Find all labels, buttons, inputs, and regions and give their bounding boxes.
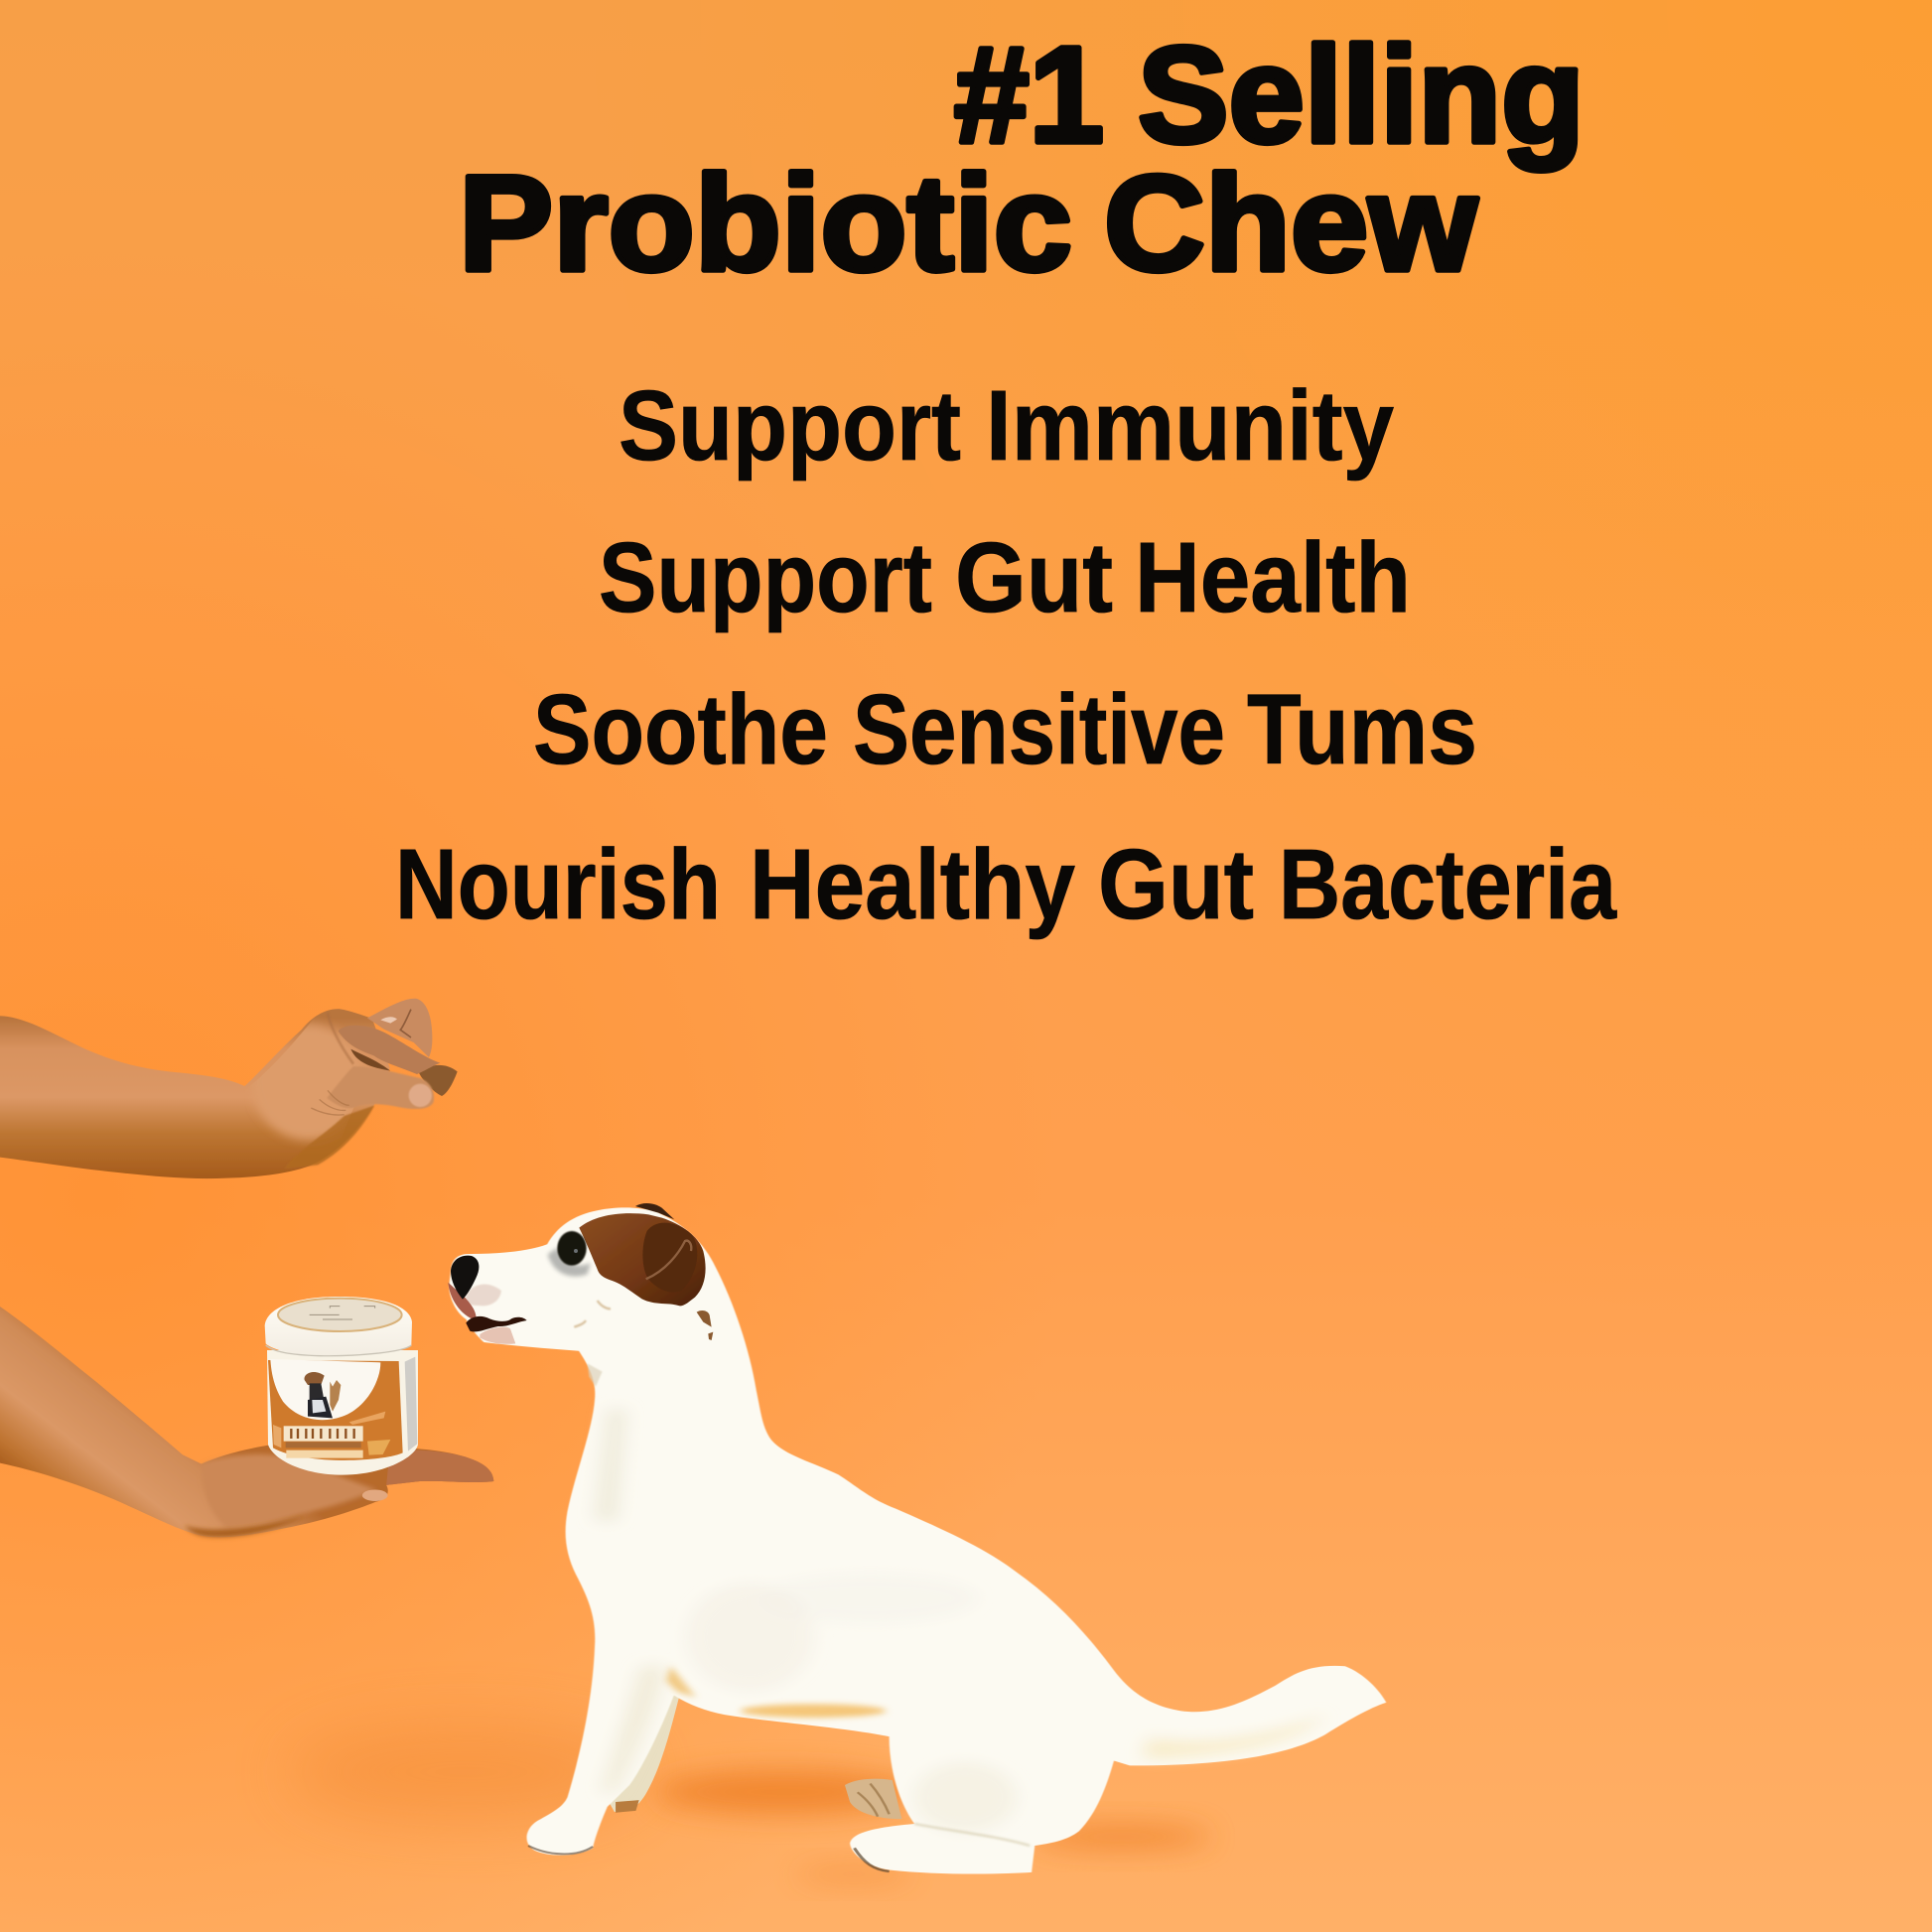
neck spot <box>697 1311 713 1340</box>
palm lower edge <box>185 1516 305 1537</box>
fingernail highlight <box>380 1017 397 1024</box>
cheek marks <box>574 1301 611 1327</box>
open mouth <box>466 1316 527 1331</box>
eye <box>557 1231 587 1266</box>
title line 2: Chew <box>1104 148 1477 300</box>
label dog illustration <box>305 1372 341 1418</box>
benefits list <box>395 370 1617 940</box>
jar lid <box>265 1297 412 1356</box>
benefit: gut bacteria: Nourish <box>395 829 721 940</box>
arm and palm <box>0 1307 493 1537</box>
lower jaw <box>480 1327 515 1344</box>
muzzle patch <box>465 1285 501 1306</box>
product jar <box>265 1297 418 1475</box>
benefit: gut bacteria: Healthy <box>750 829 1075 940</box>
benefit: gut bacteria: Bacteria <box>1279 829 1617 940</box>
palm tone <box>202 1454 375 1529</box>
curled finger crease <box>400 1010 411 1037</box>
side info panel <box>405 1357 417 1451</box>
fur shading <box>595 1409 1326 1831</box>
back paw toes <box>858 1783 890 1817</box>
thumb nail <box>362 1489 388 1501</box>
throat shade <box>588 1363 603 1387</box>
benefit: immunity: Support <box>619 370 961 482</box>
ear <box>642 1223 697 1292</box>
index finger <box>339 1026 440 1074</box>
hand detail <box>251 999 458 1169</box>
orange label <box>268 1360 403 1460</box>
dog body <box>449 1207 1386 1873</box>
jar base <box>267 1350 418 1475</box>
back paw <box>845 1779 901 1819</box>
lid edge <box>266 1345 411 1356</box>
forearm <box>0 1009 390 1178</box>
hind paw toes <box>855 1848 890 1871</box>
benefit: gut health: Support <box>599 522 932 633</box>
brown head patch <box>579 1213 706 1306</box>
fingers <box>386 1449 493 1485</box>
benefit: sensitive tums: Tums <box>1247 674 1477 785</box>
far front paw shade <box>616 1800 639 1813</box>
floor shadows <box>288 1723 1211 1883</box>
title line 2 <box>459 148 1477 300</box>
curled fingers <box>367 999 432 1057</box>
nose <box>451 1256 479 1300</box>
dog <box>448 1203 1386 1873</box>
title line 1: Selling <box>1138 19 1585 172</box>
lip and tongue <box>448 1283 477 1320</box>
upper hand holding chew <box>0 999 458 1178</box>
benefit: gut health <box>599 522 1411 633</box>
front paw toes <box>528 1846 593 1854</box>
thumb nail <box>409 1084 432 1107</box>
lower hand holding jar <box>0 1307 493 1537</box>
benefit: gut bacteria: Gut <box>1098 829 1254 940</box>
far front leg <box>598 1676 679 1812</box>
white scoop on label <box>270 1359 380 1420</box>
benefit: sensitive tums: Sensitive <box>853 674 1225 785</box>
benefit: sensitive tums <box>533 674 1477 785</box>
benefit: gut health: Health <box>1135 522 1411 633</box>
ear tip <box>635 1203 674 1219</box>
benefit: immunity: Immunity <box>986 370 1394 482</box>
benefit: gut health: Gut <box>955 522 1113 633</box>
knuckle edge <box>328 1013 353 1064</box>
hind foot line <box>914 1824 1030 1846</box>
lid marks <box>310 1307 375 1319</box>
title line 2: Probiotic <box>459 148 1072 300</box>
ear fold <box>646 1241 691 1279</box>
dog head detail <box>448 1203 713 1387</box>
under wrist shadow <box>285 1105 374 1169</box>
label name blocks <box>273 1412 390 1458</box>
dog silhouette <box>449 1207 1386 1873</box>
title <box>459 19 1585 300</box>
benefit: immunity <box>619 370 1394 482</box>
hand back tone <box>251 1025 364 1140</box>
thumb <box>327 1066 434 1109</box>
title line 1: #1 <box>954 19 1104 172</box>
benefit: sensitive tums: Soothe <box>533 674 828 785</box>
palm creases <box>311 1090 349 1115</box>
treat chew <box>419 1065 458 1096</box>
eye glint <box>574 1249 578 1253</box>
lid seal <box>278 1299 402 1331</box>
finger gap shadow <box>350 1049 390 1071</box>
eye shading <box>548 1248 591 1277</box>
yellow belly tint <box>666 1666 886 1718</box>
benefit: gut bacteria <box>395 829 1617 940</box>
